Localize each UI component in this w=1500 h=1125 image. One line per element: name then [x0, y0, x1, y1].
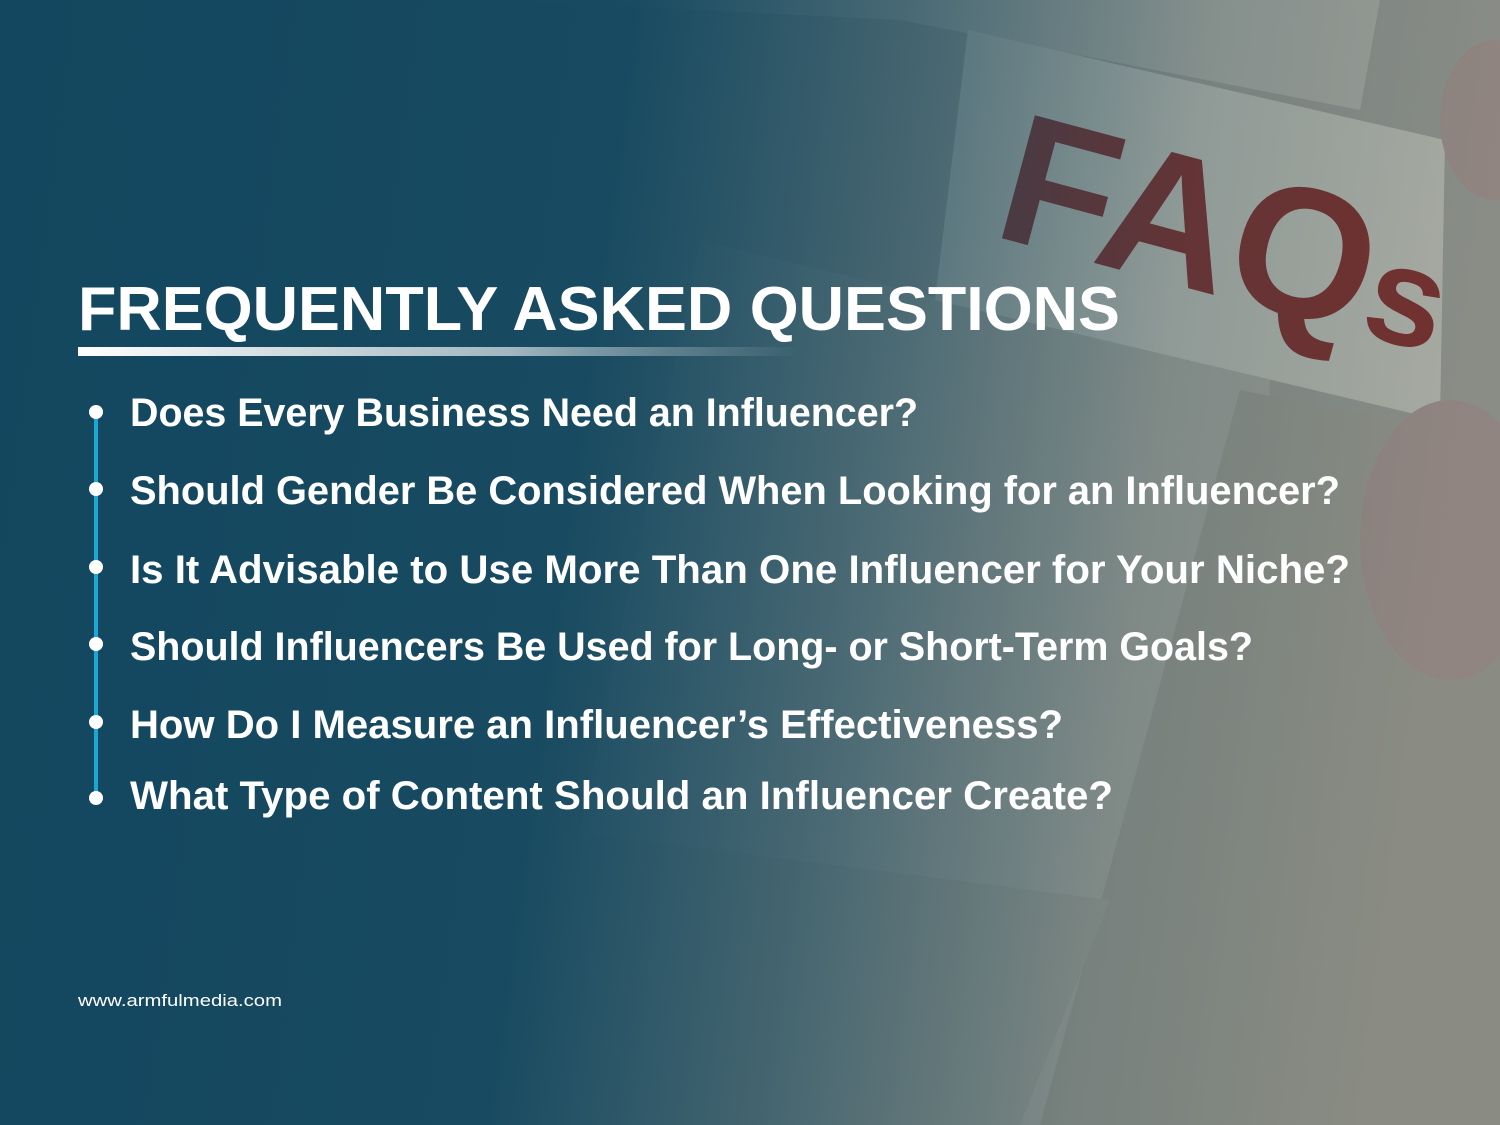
questions list: Is It Advisable to Use More Than One Influencer for Your Niche? [130, 548, 1350, 592]
questions list: How Do I Measure an Influencer’s Effectiveness? [130, 703, 1063, 747]
questions list: Should Influencers Be Used for Long- or Short-Term Goals? [130, 625, 1253, 669]
icon: fingers [1440, 40, 1500, 200]
FAQs lettering: FAQs [980, 75, 1476, 392]
title underline [78, 347, 798, 356]
questions list [130, 391, 1350, 818]
timeline line [94, 412, 98, 797]
questions list: What Type of Content Should an Influencer Create? [130, 774, 1113, 818]
questions list: Does Every Business Need an Influencer? [130, 391, 918, 435]
bullets [89, 405, 103, 805]
questions list: Should Gender Be Considered When Looking for an Influencer? [130, 469, 1340, 513]
footer url: www.armfulmedia.com [77, 991, 282, 1010]
title: FREQUENTLY ASKED QUESTIONS [78, 275, 1120, 344]
